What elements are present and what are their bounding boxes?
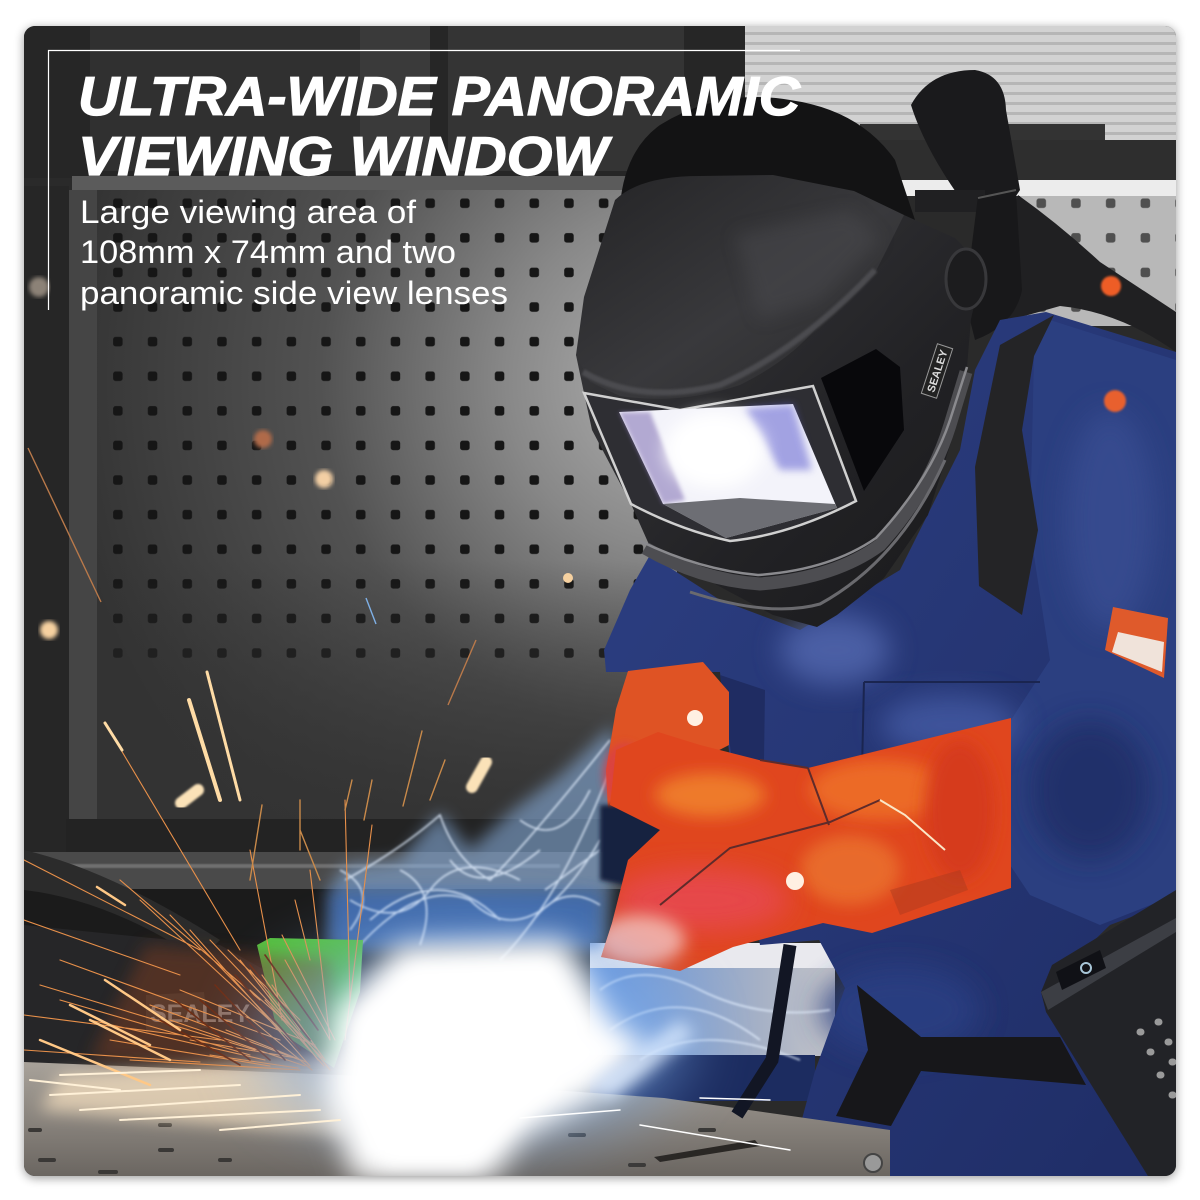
background panel behind the torch	[590, 943, 835, 1101]
flying sparks on the pegboard	[28, 277, 573, 803]
description text: 108mm x 74mm and two	[80, 234, 456, 270]
sleeve badge	[1105, 607, 1168, 678]
description text	[80, 194, 508, 311]
green workpiece and machine label	[146, 938, 363, 1068]
fan of fine orange sparks	[24, 723, 445, 1070]
brand label on helmet	[921, 344, 953, 398]
title: VIEWING WINDOW	[78, 125, 612, 187]
molten spray haze	[40, 945, 350, 1135]
hot shoulder sparks	[1101, 276, 1126, 412]
dark gap between hands	[596, 802, 660, 887]
power unit on belt	[1041, 890, 1176, 1176]
white ember dots	[687, 710, 804, 890]
side lens	[821, 349, 904, 491]
brand label on helmet: SEALEY	[925, 348, 951, 394]
backpack strap	[975, 315, 1054, 615]
welding helmet	[576, 175, 986, 627]
description text: panoramic side view lenses	[80, 275, 508, 311]
welding arc glow	[250, 930, 695, 1180]
bright long spark streaks	[30, 672, 790, 1150]
title	[78, 65, 801, 187]
description text: Large viewing area of	[80, 194, 416, 230]
lower rim highlight	[645, 372, 966, 584]
black hose and hood	[620, 70, 1176, 352]
adjustment knob	[946, 249, 986, 309]
frame lines around heading	[48, 50, 800, 310]
waist belt and strap	[836, 985, 1086, 1126]
overalls and jacket	[604, 276, 1176, 1176]
panoramic viewing window	[584, 349, 904, 541]
green workpiece and machine label: SEALEY	[150, 1000, 250, 1028]
red leather gloves	[595, 662, 1011, 971]
tinted visor shade	[576, 175, 904, 399]
helmet shell	[576, 215, 983, 627]
upper glove	[603, 662, 729, 812]
lower glove	[595, 718, 1011, 971]
torch cable	[737, 945, 790, 1115]
table top	[24, 1062, 890, 1176]
blue smoke	[330, 726, 830, 1060]
title: ULTRA-WIDE PANORAMIC	[78, 65, 801, 127]
